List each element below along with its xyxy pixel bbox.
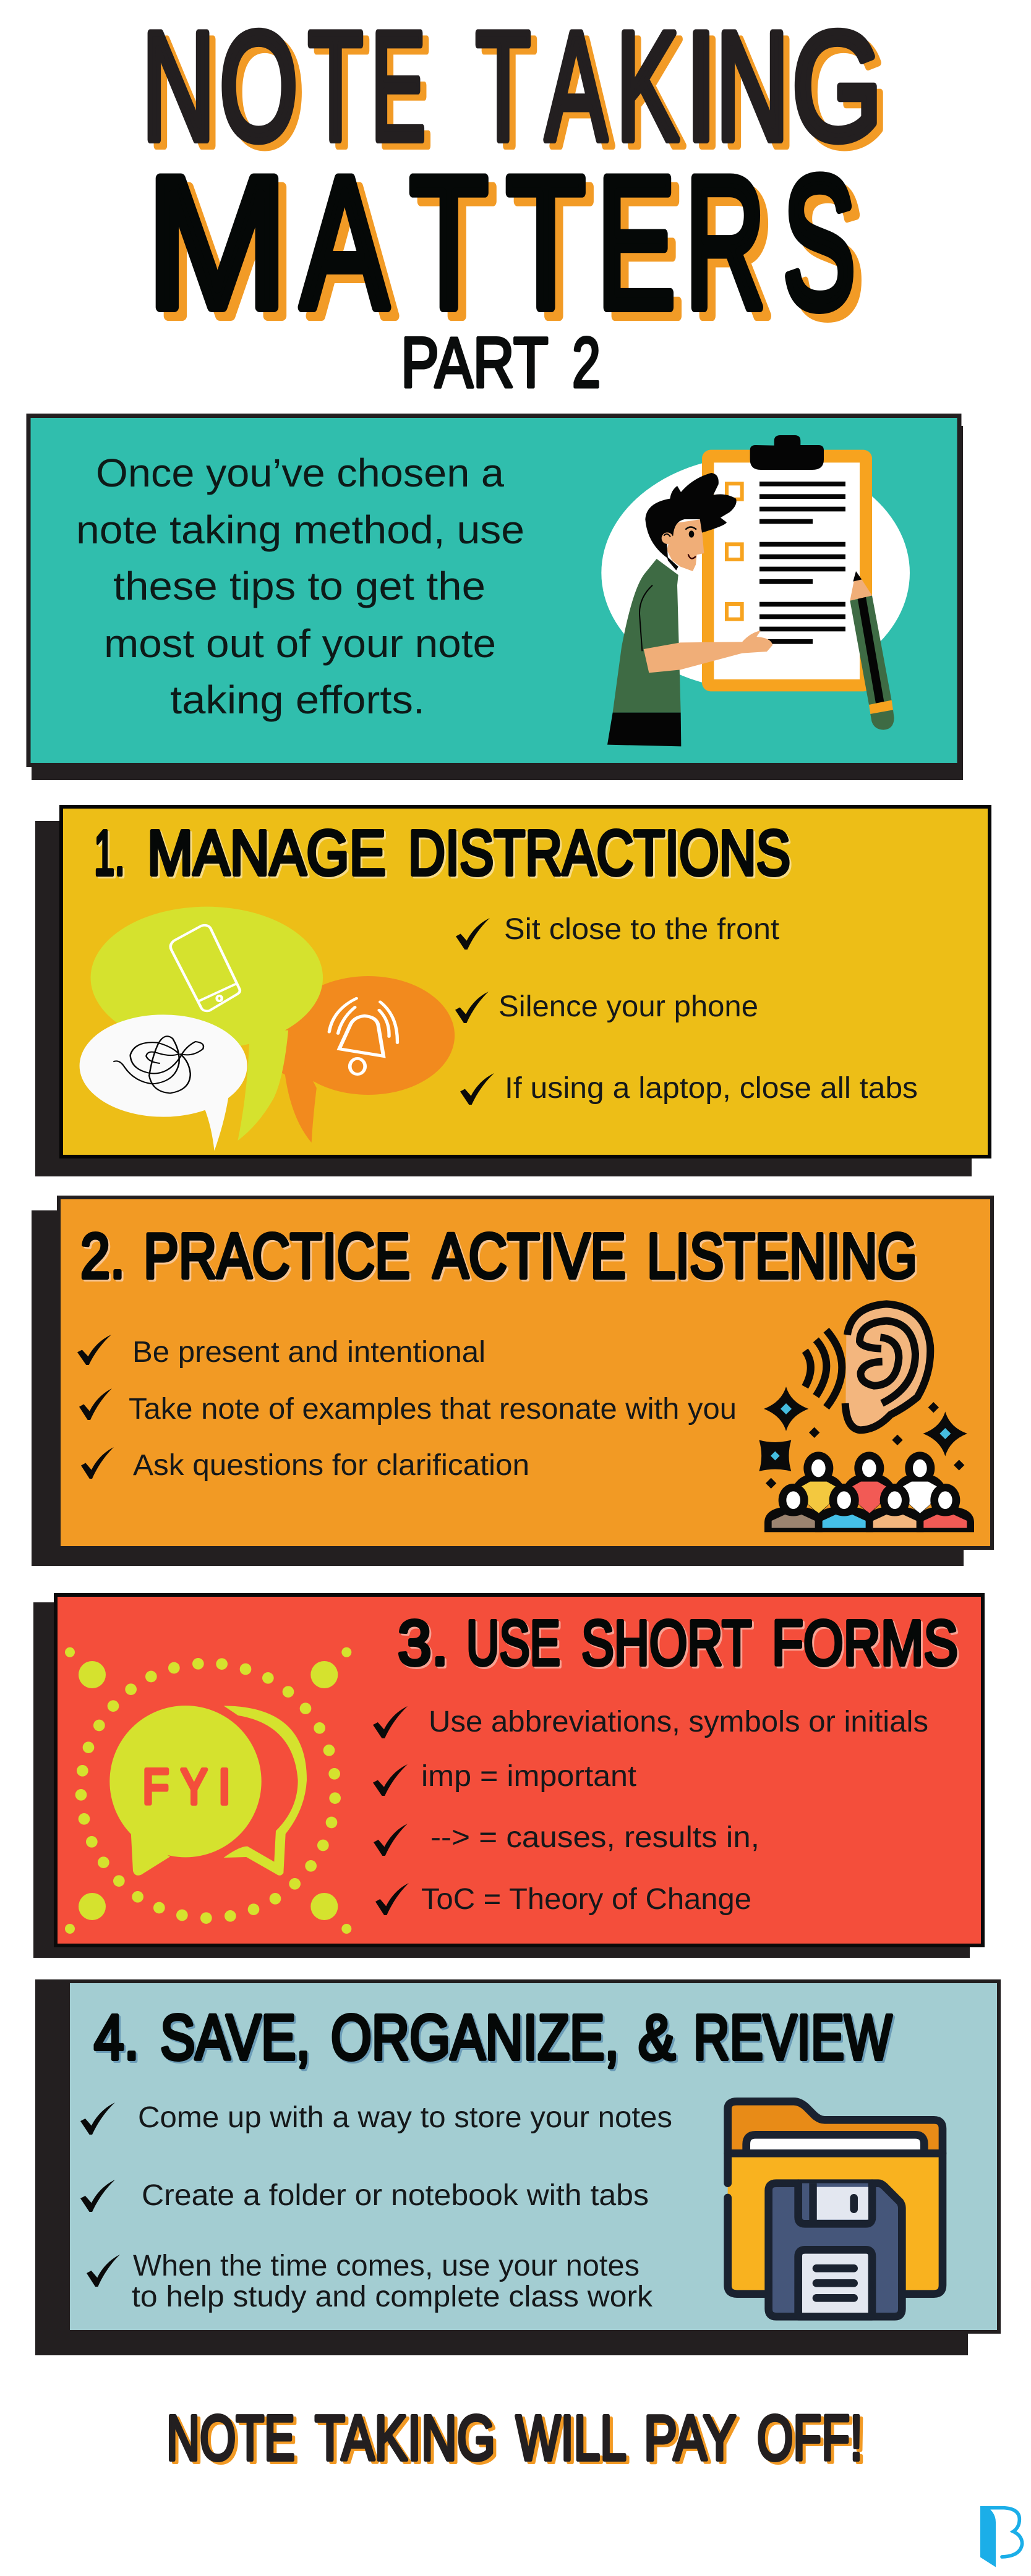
title line: note taking: N bbox=[716, 0, 789, 173]
heading: ORGANIZE, bbox=[333, 2004, 621, 2075]
heading: SHORT bbox=[583, 1609, 753, 1680]
heading: LISTENING bbox=[649, 1222, 919, 1293]
closing line: WILL bbox=[519, 2405, 628, 2476]
heading: SAVE, bbox=[160, 2002, 310, 2073]
icon: FYI speech bubbles with dots: Y bbox=[181, 1759, 207, 1814]
title line: note taking: K bbox=[616, 0, 679, 173]
heading: REVIEW bbox=[693, 2002, 892, 2073]
heading: 2. bbox=[82, 1222, 127, 1293]
closing line: NOTE bbox=[169, 2405, 298, 2476]
heading: DISTRACTIONS bbox=[410, 819, 792, 890]
title line: matters: E bbox=[597, 138, 675, 347]
heading bbox=[94, 817, 792, 890]
title line: note taking: G bbox=[798, 6, 889, 179]
title line: matters: S bbox=[791, 147, 863, 356]
intro text: these tips to get the bbox=[113, 564, 486, 608]
heading: 4. bbox=[94, 2002, 139, 2073]
title line: note taking: I bbox=[685, 0, 717, 173]
title line: note taking: T bbox=[482, 6, 537, 179]
title line: note taking: N bbox=[148, 6, 221, 179]
title line: matters: A bbox=[301, 138, 388, 347]
title line: note taking: N bbox=[142, 0, 215, 173]
title line: matters: T bbox=[506, 138, 585, 347]
icon: folder and floppy disk bbox=[728, 2101, 943, 2316]
logo bbox=[980, 2506, 1022, 2567]
heading: USE bbox=[468, 1609, 562, 1680]
heading: & bbox=[638, 2002, 675, 2073]
bullet: arrow: --> = causes, results in, bbox=[430, 1821, 759, 1854]
title line: note taking: T bbox=[308, 0, 363, 173]
icon: FYI speech bubbles with dots bbox=[65, 1647, 351, 1934]
title line: matters: A bbox=[309, 147, 396, 356]
bullet: close tabs: If using a laptop, close all tabs bbox=[505, 1072, 918, 1105]
heading: 1. bbox=[96, 819, 127, 890]
heading: REVIEW bbox=[695, 2004, 894, 2075]
heading: FORMS bbox=[774, 1609, 960, 1680]
title line: note taking: E bbox=[377, 6, 432, 179]
title line: matters: T bbox=[409, 138, 488, 347]
bullet: be present: Be present and intentional bbox=[132, 1336, 486, 1369]
bullet: store notes: Come up with a way to store your notes bbox=[138, 2101, 672, 2134]
title line: note taking: I bbox=[691, 6, 724, 179]
title line: matters: R bbox=[693, 147, 774, 356]
bullet: use notes: to help study and complete class work bbox=[132, 2281, 653, 2313]
title line: note taking: N bbox=[722, 6, 795, 179]
title line: matters: T bbox=[418, 147, 496, 356]
bullet: use notes bbox=[87, 2250, 653, 2313]
closing line: NOTE bbox=[166, 2402, 295, 2473]
panel: 2. practice active listening bbox=[32, 1197, 992, 1566]
heading: & bbox=[640, 2004, 677, 2075]
heading: 4. bbox=[96, 2004, 141, 2075]
heading: ACTIVE bbox=[435, 1222, 628, 1293]
heading: USE bbox=[466, 1607, 560, 1678]
icon: FYI speech bubbles with dots: I bbox=[218, 1759, 231, 1814]
heading: MANAGE bbox=[147, 817, 386, 888]
title line: note taking: O bbox=[220, 0, 298, 173]
title line: matters: R bbox=[685, 138, 766, 347]
closing line: PAY bbox=[644, 2402, 735, 2473]
bullet: take note: Take note of examples that resonate with you bbox=[129, 1393, 737, 1426]
intro text: taking efforts. bbox=[170, 678, 425, 722]
title line: note taking: A bbox=[545, 0, 607, 173]
title line: note taking: G bbox=[792, 0, 883, 173]
heading: SAVE, bbox=[162, 2004, 312, 2075]
heading bbox=[398, 1607, 960, 1680]
heading: PRACTICE bbox=[143, 1220, 410, 1291]
illustration: person with clipboard and pencil bbox=[601, 435, 910, 746]
heading: MANAGE bbox=[149, 819, 388, 890]
closing line: TAKING bbox=[315, 2402, 495, 2473]
closing line: TAKING bbox=[318, 2405, 498, 2476]
title line: note taking: E bbox=[371, 0, 426, 173]
intro text: note taking method, use bbox=[76, 508, 524, 552]
closing line bbox=[166, 2402, 866, 2476]
closing line: WILL bbox=[516, 2402, 625, 2473]
heading: DISTRACTIONS bbox=[408, 817, 790, 888]
title line: note taking: O bbox=[226, 6, 304, 179]
closing line: OFF! bbox=[760, 2405, 866, 2476]
heading: 1. bbox=[94, 817, 125, 888]
heading: LISTENING bbox=[647, 1220, 917, 1291]
bullet: folder: Create a folder or notebook with tabs bbox=[142, 2179, 649, 2212]
title line: matters bbox=[146, 138, 863, 356]
title line: note taking: T bbox=[314, 6, 369, 179]
title line: matters: E bbox=[605, 147, 683, 356]
heading: SHORT bbox=[581, 1607, 751, 1678]
panel: 3. use short forms bbox=[33, 1595, 983, 1958]
bullet: ask questions: Ask questions for clarification bbox=[133, 1449, 529, 1482]
icon: FYI speech bubbles with dots: F bbox=[142, 1759, 169, 1814]
heading: 3. bbox=[400, 1609, 450, 1680]
heading: ACTIVE bbox=[433, 1220, 626, 1291]
title line: matters: T bbox=[515, 147, 593, 356]
title line: matters: M bbox=[154, 147, 296, 356]
heading: ORGANIZE, bbox=[331, 2002, 619, 2073]
heading: FORMS bbox=[772, 1607, 958, 1678]
subtitle: part 2: 2 bbox=[572, 323, 601, 402]
bullet: sit close: Sit close to the front bbox=[504, 913, 779, 946]
bullet: ToC: ToC = Theory of Change bbox=[421, 1883, 751, 1916]
title line: matters: S bbox=[783, 138, 855, 347]
title line: note taking bbox=[142, 0, 889, 179]
title bbox=[142, 0, 889, 402]
panel: intro bbox=[28, 415, 963, 780]
icon: ear and audience bbox=[759, 1304, 974, 1532]
heading: 2. bbox=[80, 1220, 125, 1291]
title line: note taking: K bbox=[622, 6, 685, 179]
panel: 4. save, organize, review bbox=[35, 1979, 999, 2355]
title line: matters: M bbox=[146, 138, 288, 347]
panel: 1. manage distractions bbox=[35, 807, 990, 1176]
heading: PRACTICE bbox=[145, 1222, 412, 1293]
subtitle: part 2: PART bbox=[401, 323, 547, 402]
bullet: silence phone: Silence your phone bbox=[498, 990, 758, 1023]
bullet: abbreviations: Use abbreviations, symbols or initials bbox=[429, 1706, 928, 1738]
closing line: PAY bbox=[647, 2405, 738, 2476]
bullet: use notes: When the time comes, use your notes bbox=[133, 2250, 640, 2282]
title line: note taking: T bbox=[476, 0, 531, 173]
heading bbox=[80, 1220, 919, 1293]
bullet: imp: imp = important bbox=[421, 1760, 636, 1793]
heading: 3. bbox=[398, 1607, 448, 1678]
intro text: Once you’ve chosen a bbox=[96, 451, 504, 495]
icon: speech bubbles bbox=[80, 907, 455, 1151]
heading bbox=[94, 2002, 894, 2075]
closing line: OFF! bbox=[757, 2402, 863, 2473]
intro text: most out of your note bbox=[104, 621, 496, 666]
intro text bbox=[76, 451, 524, 722]
title line: note taking: A bbox=[552, 6, 614, 179]
